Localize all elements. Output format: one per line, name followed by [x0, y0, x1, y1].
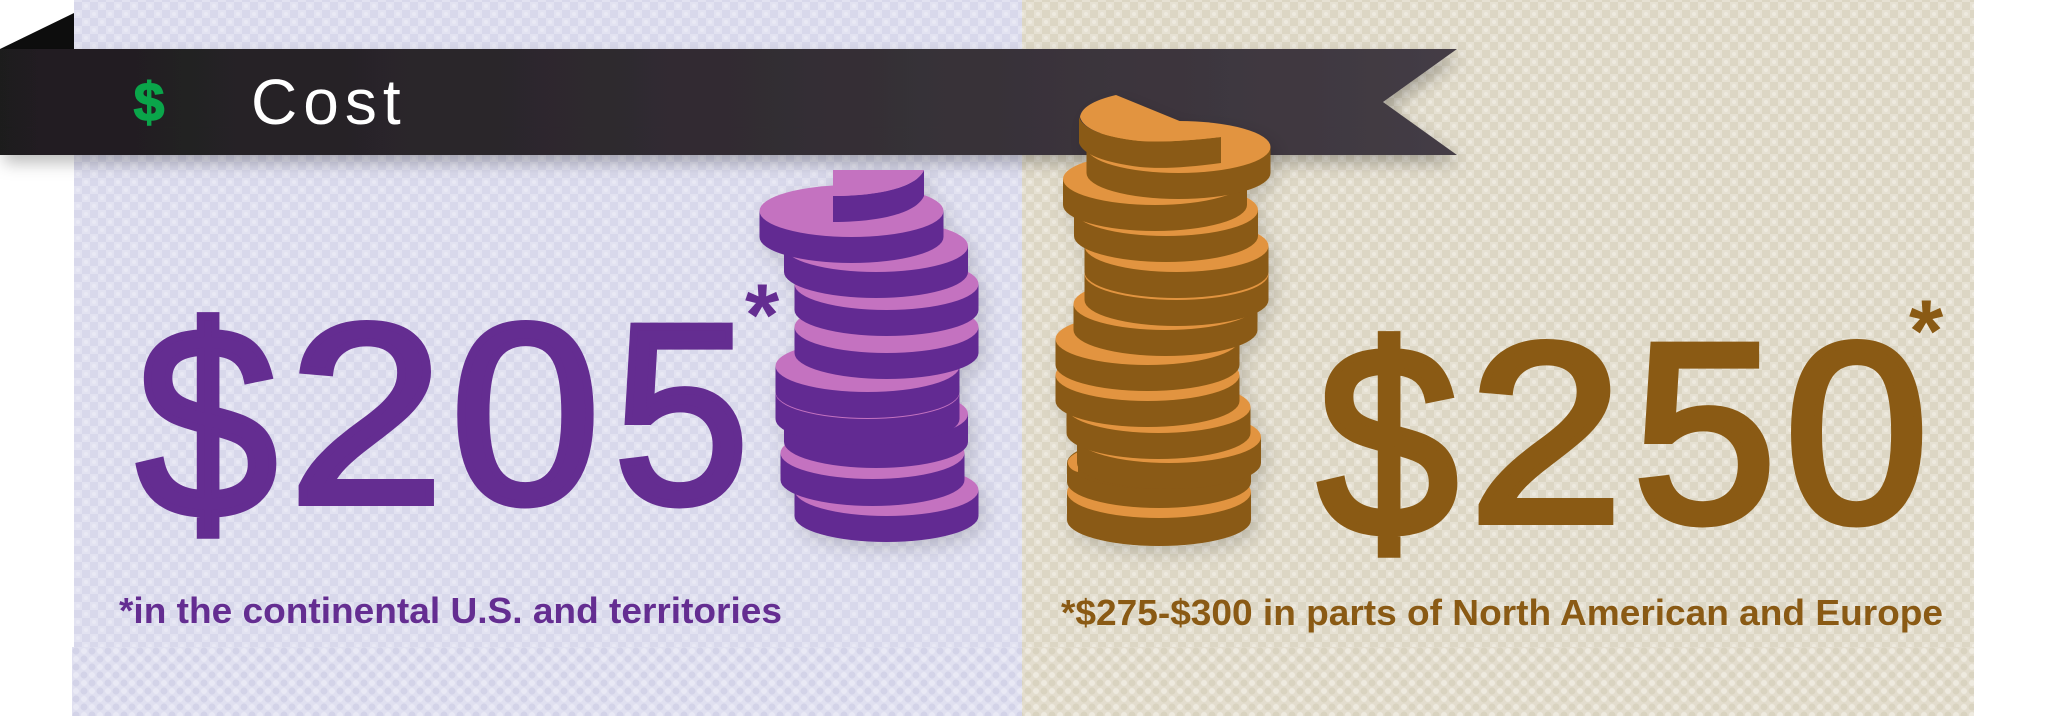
big price: $250: 5	[1633, 291, 1776, 576]
caption: brown note: *$275-$300 in parts of North American and Europe	[1061, 592, 1943, 633]
big price: $205: 5	[614, 271, 749, 556]
big price: $250: 0	[1785, 291, 1928, 576]
icon: green dollar: $	[134, 71, 164, 133]
asterisk: purple: *	[745, 265, 780, 364]
caption: purple note: *in the continental U.S. and territories	[119, 590, 782, 631]
ribbon banner	[0, 49, 1457, 155]
asterisk: brown: *	[1909, 281, 1944, 380]
heading: Cost: Cost	[251, 66, 407, 138]
coin stack: purple	[760, 170, 978, 542]
ribbon fold	[0, 13, 74, 49]
big price: $250: 2	[1469, 291, 1623, 576]
panel: purple background	[72, 0, 1022, 716]
coin stack: orange	[1056, 95, 1270, 546]
big price: $205	[137, 271, 749, 574]
big price: $205: 0	[451, 272, 600, 557]
big price: $250: $	[1318, 292, 1458, 593]
panel: tan background	[1022, 0, 1974, 716]
big price: $205: 2	[289, 272, 444, 556]
big price: $250	[1318, 291, 1928, 593]
big price: $205: $	[137, 273, 277, 574]
